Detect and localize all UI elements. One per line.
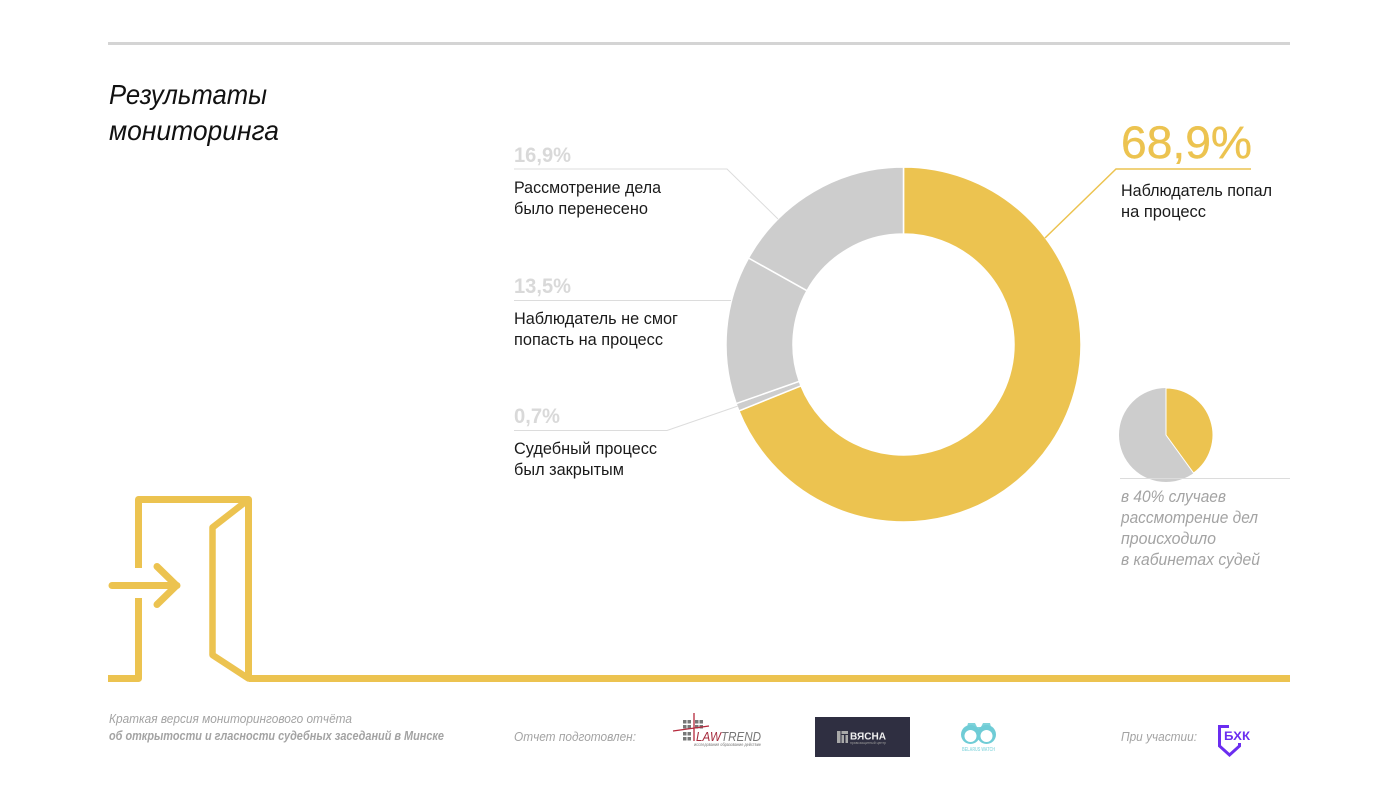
footer description: об открытости и гласности судебных заседаний в Минске (109, 728, 444, 743)
callout: 0,7%: Судебный процесс (514, 439, 657, 458)
callout: 16,9%: было перенесено (514, 199, 648, 218)
title: мониторинга (109, 115, 279, 146)
note: 40%: в 40% случаев (1121, 487, 1226, 506)
logo: BHK: БХК (1224, 729, 1251, 743)
note: 40%: происходило (1121, 529, 1216, 548)
callout: 68,9%: 68,9% (1121, 117, 1252, 168)
callout: 68,9%: на процесс (1121, 202, 1206, 221)
callout: 0,7%: 0,7% (514, 405, 560, 428)
title (109, 79, 279, 146)
logo: Vyasna: правозащитный центр (850, 741, 886, 745)
footer description: Краткая версия мониторингового отчёта (109, 711, 352, 726)
note: 40% (1120, 478, 1290, 569)
footer description (109, 711, 444, 743)
footer label: with participation: При участии: (1121, 729, 1197, 744)
title: Результаты (109, 79, 267, 110)
callout: 16,9% (514, 144, 778, 219)
logo: Lawtrend: LAWTREND (696, 729, 761, 744)
logo: Lawtrend: исследования образование действие (694, 741, 761, 747)
logo: Belarus Watch (961, 723, 996, 753)
callout: 0,7%: был закрытым (514, 460, 624, 479)
small pie chart (1119, 388, 1213, 482)
note: 40%: в кабинетах судей (1121, 550, 1260, 569)
logo: Belarus Watch: BELARUS WATCH (962, 747, 995, 753)
callout: 13,5%: Наблюдатель не смог (514, 309, 678, 328)
callout: 13,5%: 13,5% (514, 275, 571, 298)
callout: 16,9%: 16,9% (514, 144, 571, 167)
donut chart (726, 167, 1081, 522)
callout: 0,7% (514, 405, 738, 479)
baseline (249, 675, 1290, 682)
logo: Lawtrend (673, 713, 761, 747)
callout: 16,9%: Рассмотрение дела (514, 178, 662, 197)
footer label: prepared by: Отчет подготовлен: (514, 729, 636, 744)
callout: 68,9% (1045, 117, 1272, 238)
logo: Vyasna: ВЯСНА (850, 730, 886, 742)
note: 40%: рассмотрение дел (1120, 508, 1258, 527)
callout: 13,5%: попасть на процесс (514, 330, 663, 349)
icon: door with arrow (108, 500, 248, 678)
logo: Vyasna (815, 717, 910, 757)
callout: 68,9%: Наблюдатель попал (1121, 181, 1272, 200)
logo: BHK (1220, 726, 1251, 755)
callout: 13,5% (514, 275, 731, 349)
